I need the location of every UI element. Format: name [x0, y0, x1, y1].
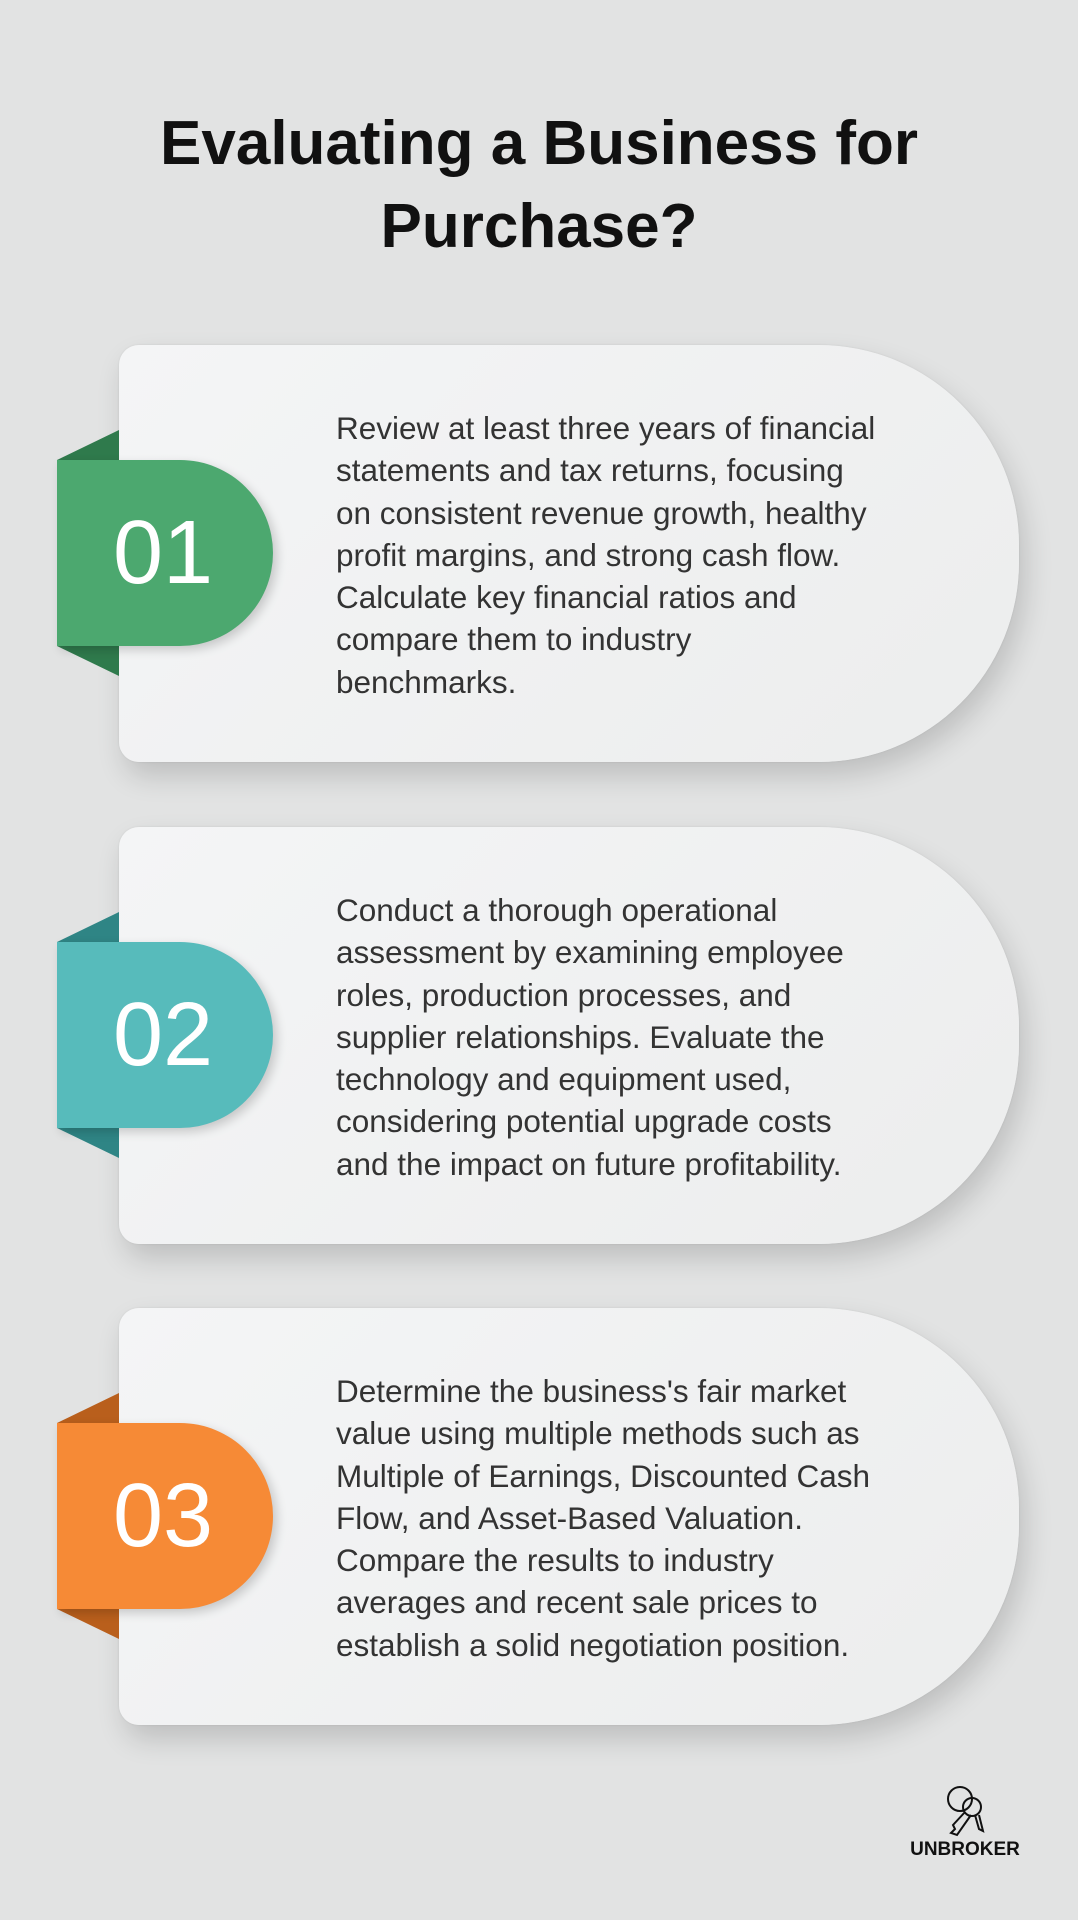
text 2: Conduct a thorough operational assessment by examining employee roles, production processes, and supplier relationships. Evaluate the technology and equipment used, considering potential upgrade costs and the impact on future profitability.: [336, 892, 844, 1182]
card 3: [119, 1308, 1019, 1725]
text 1: Review at least three years of financial statements and tax returns, focusing on consistent revenue growth, healthy profit margins, and strong cash flow. Calculate key financial ratios and compare them to industry: [336, 410, 875, 657]
card 1: [119, 345, 1019, 762]
logo: [910, 1786, 1020, 1860]
badge 03: 03: [113, 1466, 213, 1566]
text 1: benchmarks.: [336, 664, 516, 700]
badge 02: [57, 912, 281, 1158]
text 3: Determine the business's fair market value using multiple methods such as Multiple of Earnings, Discounted Cash Flow, and Asset-Based Valuation. Compare the results to industry averages and recent sale prices to establish a solid negotiation position.: [336, 1373, 870, 1663]
badge 01: [57, 430, 281, 676]
card 2: [119, 827, 1019, 1244]
title: [160, 109, 918, 261]
badge 03: [57, 1393, 281, 1639]
brand name: UNBROKER: [910, 1839, 1020, 1860]
badge 02: 02: [113, 985, 213, 1085]
icon: keys: [947, 1786, 984, 1836]
title: Purchase?: [380, 192, 698, 261]
badge 01: 01: [113, 503, 213, 603]
title: Evaluating a Business for: [160, 109, 918, 178]
